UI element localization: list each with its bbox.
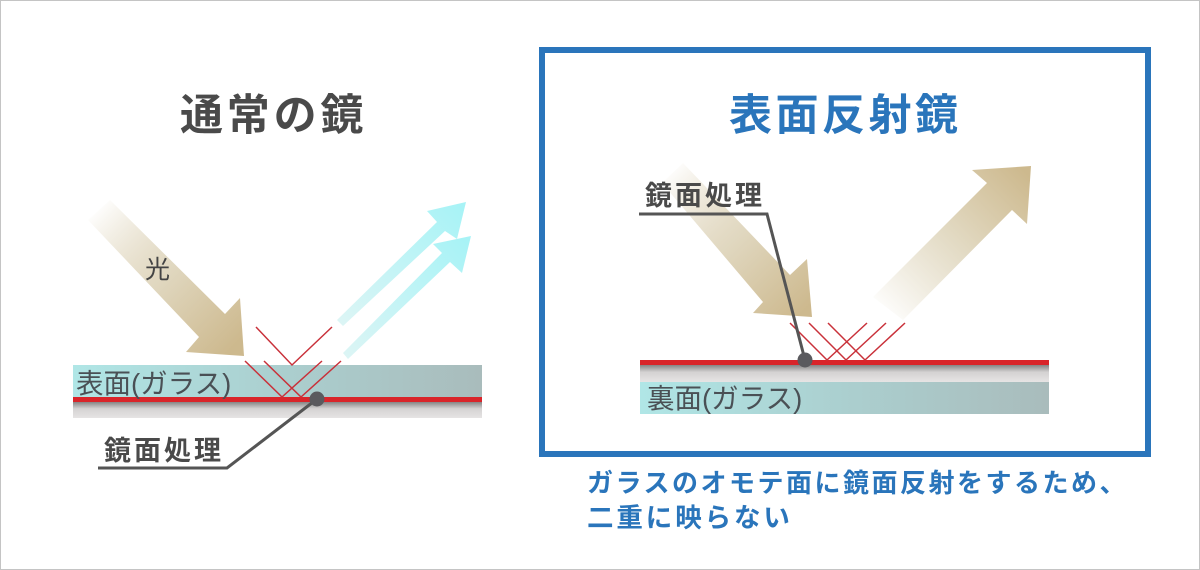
mirror coating line xyxy=(640,360,1049,365)
callout: mirror coating xyxy=(639,181,812,368)
label: light: 光 xyxy=(145,256,170,284)
panel: front surface mirror xyxy=(542,50,1148,454)
caption: ガラスのオモテ面に鏡面反射をするため、 xyxy=(587,468,1128,498)
label: surface glass: 表面(ガラス) xyxy=(76,368,231,399)
caption xyxy=(587,468,1128,533)
caption: 二重に映らない xyxy=(587,503,793,533)
heading: normal mirror: 通常の鏡 xyxy=(180,92,367,140)
panel: normal mirror xyxy=(73,92,482,468)
glass layer xyxy=(73,365,482,398)
arrow: reflected light lower xyxy=(343,236,471,359)
red reflection rays xyxy=(790,323,905,360)
mirror coating line xyxy=(73,397,482,402)
callout: mirror coating: 鏡面処理 xyxy=(104,436,224,466)
arrow: incoming light xyxy=(88,200,244,356)
heading: front surface mirror: 表面反射鏡 xyxy=(729,92,962,140)
backing layer xyxy=(73,401,482,418)
arrow: reflected light xyxy=(873,166,1031,320)
arrow: reflected light upper xyxy=(337,202,466,326)
glass layer xyxy=(640,382,1049,414)
backing layer xyxy=(640,364,1049,382)
callout: mirror coating xyxy=(98,392,324,468)
panel frame xyxy=(542,50,1148,454)
label: back glass: 裏面(ガラス) xyxy=(647,383,802,414)
red reflection rays xyxy=(245,327,341,397)
arrow: incoming light xyxy=(662,163,812,317)
callout: mirror coating: 鏡面処理 xyxy=(645,181,765,211)
